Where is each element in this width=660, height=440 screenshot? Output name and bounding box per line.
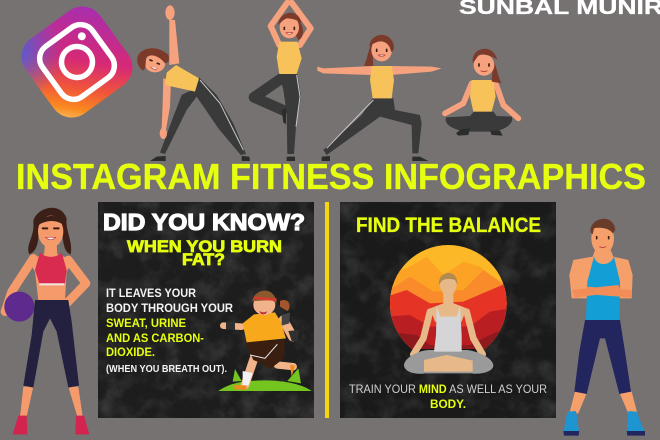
panel: did you know xyxy=(98,202,314,418)
heading: find the balance: FIND THE BALANCE xyxy=(356,214,541,237)
figure: man with crossed arms xyxy=(563,219,645,436)
body text: BODY THROUGH YOUR xyxy=(106,301,233,315)
figure: woman holding exercise ball xyxy=(4,208,89,434)
figure: tree yoga pose xyxy=(254,3,311,161)
divider bar xyxy=(325,202,329,418)
figure: seated meditation pose xyxy=(445,49,518,136)
subheading: when you burn fat xyxy=(127,237,282,269)
caption: train your mind xyxy=(349,382,547,411)
caption: train your mind: BODY. xyxy=(430,397,466,411)
body text: DIOXIDE. xyxy=(106,345,155,359)
illustration: woman running on grass xyxy=(218,291,312,391)
heading: did you know: DID YOU KNOW? xyxy=(103,209,305,235)
title: INSTAGRAM FITNESS INFOGRAPHICS xyxy=(16,156,646,197)
body text: AND AS CARBON- xyxy=(106,331,204,345)
subheading: when you burn fat: FAT? xyxy=(182,250,225,269)
icon: Instagram logo xyxy=(13,0,141,126)
body text: SWEAT, URINE xyxy=(106,316,186,330)
caption: train your mind: TRAIN YOUR MIND AS WELL AS YOUR xyxy=(349,382,547,396)
panel: find the balance xyxy=(340,202,556,418)
body text xyxy=(106,286,233,375)
body text: IT LEAVES YOUR xyxy=(106,286,196,300)
figure: warrior yoga pose xyxy=(317,35,442,161)
subheading: when you burn fat: WHEN YOU BURN xyxy=(127,237,282,256)
figure: side bend yoga pose xyxy=(137,5,250,161)
body text: (WHEN YOU BREATH OUT). xyxy=(106,364,227,375)
illustration: meditating woman and sunset mountains xyxy=(387,242,510,374)
